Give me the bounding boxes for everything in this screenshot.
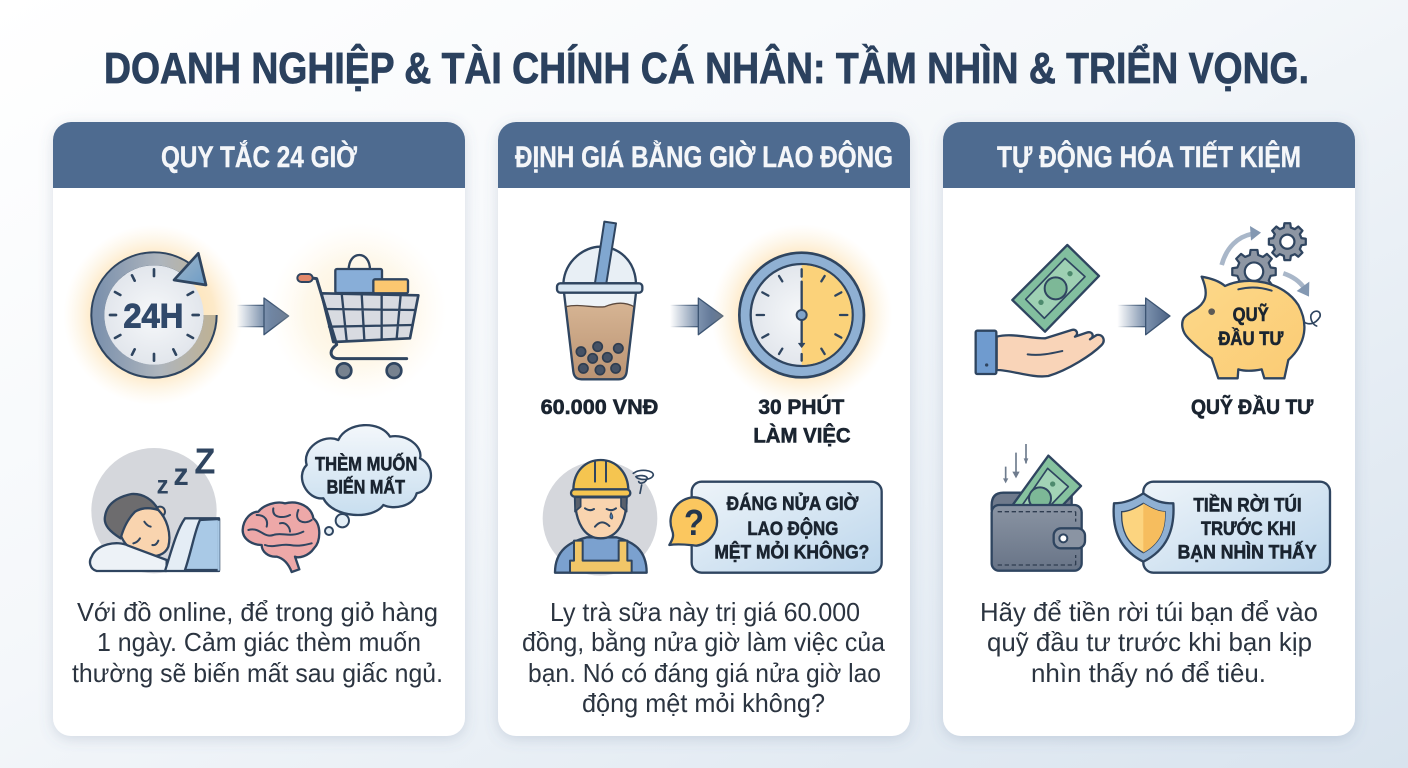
panel header: quy tắc 24 giờ [53,122,465,188]
panel: định giá bằng giờ lao động [498,122,910,736]
label: work time: LÀM VIỆC [753,422,851,447]
body text: tự động hóa [980,597,1318,688]
label: fund: QUỸ ĐẦU TƯ [1191,394,1313,419]
icon: half hour clock [711,224,892,406]
icon: tired worker [543,460,657,576]
thought bubble [302,425,431,535]
icon: sleeping person: Z [194,440,215,481]
body text: định giá: bạn. Nó có đáng giá nửa giờ lao [528,658,881,688]
body text: định giá: động mệt mỏi không? [582,688,825,718]
panel header: quy tắc 24 giờ: QUY TẮC 24 GIỜ [161,140,357,174]
icon: 24h clock: 24H [123,297,183,335]
thought bubble: BIẾN MẤT [327,475,405,498]
callout: money leaves pocket: TIỀN RỜI TÚI [1193,493,1302,517]
body text: tự động hóa: Hãy để tiền rời túi bạn để vào [980,597,1318,627]
thought bubble: THÈM MUỐN [315,452,417,476]
body text: tự động hóa: quỹ đầu tư trước khi bạn kịp [987,627,1312,657]
label: work time: 30 PHÚT [758,394,844,419]
arrow [670,298,723,335]
body text: quy tắc 24 giờ: thường sẽ biến mất sau giấc ngủ. [72,658,443,688]
body text: quy tắc 24 giờ: Với đồ online, để trong giỏ hàng [77,597,438,627]
icon: brain [243,502,319,572]
icon: gears and cycle arrows [1222,223,1309,297]
label: work time [753,394,851,447]
body text: quy tắc 24 giờ [72,597,443,688]
body text: định giá [522,597,886,718]
panel header: tự động hóa: TỰ ĐỘNG HÓA TIẾT KIỆM [997,140,1301,174]
panel: tự động hóa tiết kiệm [943,122,1355,736]
callout: money leaves pocket: BẠN NHÌN THẤY [1178,540,1317,563]
icon: piggy bank: ĐẦU TƯ [1218,327,1284,350]
icon: hand with banknote [976,245,1104,376]
icon: piggy bank [1182,277,1320,378]
body text: định giá: đồng, bằng nửa giờ làm việc của [522,627,886,657]
icon: sleeping person: z [157,471,169,499]
body text: tự động hóa: nhìn thấy nó để tiêu. [1031,658,1266,688]
callout: question: ĐÁNG NỬA GIỜ [727,491,859,515]
callout: question: MỆT MỎI KHÔNG? [714,539,869,563]
icon: 24h clock [63,225,243,405]
body text: định giá: Ly trà sữa này trị giá 60.000 [550,597,860,627]
panel header: tự động hóa [943,122,1355,188]
body text: quy tắc 24 giờ: 1 ngày. Cảm giác thèm muốn [97,627,421,657]
icon: wallet [992,444,1085,571]
callout: money leaves pocket: TRƯỚC KHI [1201,516,1296,540]
arrow [237,298,289,335]
icon: shopping cart [270,223,447,400]
icon: sleeping person: z [173,456,189,492]
label: price: 60.000 VNĐ [541,394,658,419]
panel: quy tắc 24 giờ [53,122,465,736]
panel header: định giá [498,122,910,188]
callout: question [669,482,882,573]
callout: question: ? [684,502,704,543]
callout: question: LAO ĐỘNG [747,516,838,540]
icon: bubble tea [557,222,642,379]
icon: piggy bank: QUỸ [1233,303,1269,326]
arrow [1117,298,1170,335]
icon: sleeping person [90,440,220,573]
panel header: định giá: ĐỊNH GIÁ BẰNG GIỜ LAO ĐỘNG [515,140,893,174]
callout: money leaves pocket [1114,482,1330,573]
